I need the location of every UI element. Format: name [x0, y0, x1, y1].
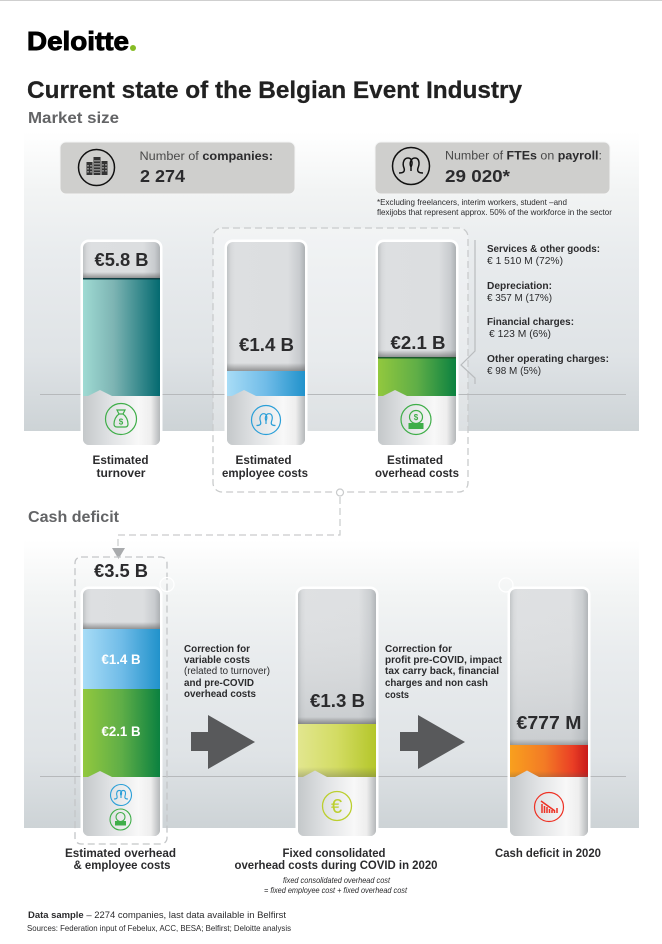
stat: number of companies	[60, 142, 295, 194]
footnote: FTEs: flexijobs that represent approx. 50% of the workforce in the sector	[377, 208, 612, 217]
text: correction for profit: charges and non cash	[385, 678, 488, 689]
circle marker: first bar	[160, 578, 174, 592]
bar: estimated overhead and employee costs: €2.1 B	[102, 723, 140, 739]
overhead breakdown list: Other operating charges:	[487, 353, 609, 365]
icon: coins: $	[414, 413, 419, 422]
arrow: first correction	[191, 715, 255, 769]
data sample note	[27, 910, 291, 933]
overhead breakdown list	[487, 243, 609, 377]
icon: people	[392, 148, 430, 184]
bar: estimated overhead costs: €2.1 B	[390, 332, 446, 353]
bar: cash deficit in 2020	[508, 586, 590, 838]
label: estimated employee costs: employee costs	[222, 466, 308, 480]
label: fixed consolidated overhead costs: Fixed consolidated	[282, 846, 386, 860]
label: estimated overhead and employee costs	[65, 846, 176, 872]
overhead breakdown list: Services & other goods:	[487, 243, 600, 255]
bar: estimated overhead costs	[376, 240, 458, 448]
bar: fixed consolidated overhead costs: €1.3 B	[310, 690, 365, 711]
data sample note: Data sample – 2274 companies, last data available in Belfirst	[28, 910, 286, 921]
bar: estimated turnover: €5.8 B	[94, 249, 148, 270]
bar: estimated overhead and employee costs	[80, 586, 162, 838]
icon: people blue	[252, 406, 280, 434]
note: formula: = fixed employee cost + fixed overhead cost	[264, 885, 408, 895]
circle marker: last bar	[499, 578, 513, 592]
icon: coins small	[110, 809, 131, 830]
text: correction for variable costs: overhead costs	[184, 689, 256, 700]
label: estimated employee costs	[222, 453, 308, 480]
dashed grouping box: employee and overhead costs	[213, 228, 468, 492]
note: formula	[264, 875, 408, 895]
bar: estimated employee costs: €1.4 B	[239, 334, 294, 355]
overhead breakdown list: € 357 M (17%)	[487, 292, 552, 304]
icon: euro	[322, 792, 352, 820]
text: correction for profit: profit pre-COVID, impact	[385, 655, 503, 666]
dashed grouping box: overhead and employee	[75, 557, 167, 844]
bar: estimated employee costs	[224, 240, 308, 448]
text: correction for variable costs: variable costs	[184, 655, 250, 666]
axis line: market size	[40, 394, 626, 396]
heading: market size: Market size	[28, 110, 119, 127]
bar: estimated overhead and employee costs: €1.4 B	[102, 651, 140, 667]
bar: estimated turnover	[80, 240, 162, 448]
overhead breakdown list: € 98 M (5%)	[487, 365, 541, 377]
overhead breakdown list: Financial charges:	[487, 316, 574, 328]
label: estimated turnover: turnover	[96, 466, 146, 480]
label: fixed consolidated overhead costs: overhead costs during COVID in 2020	[234, 858, 438, 872]
overhead breakdown list: Depreciation:	[487, 280, 552, 292]
footnote: FTEs	[377, 198, 612, 217]
arrow: second correction	[400, 715, 465, 769]
bar: fixed consolidated overhead costs	[296, 586, 378, 838]
heading: cash deficit: Cash deficit	[28, 509, 120, 526]
connector: dashed arrow from costs to deficit	[112, 489, 344, 559]
value: total costs: €3.5 B	[94, 560, 148, 581]
text: correction for profit: Correction for	[385, 644, 452, 655]
label: estimated overhead and employee costs: & employee costs	[74, 858, 171, 872]
text: correction for variable costs: and pre-COVID	[184, 678, 254, 689]
icon: coins	[401, 404, 431, 434]
text: correction for variable costs: Correction for	[184, 644, 250, 655]
Deloitte logo: Deloitte	[27, 26, 129, 56]
label: estimated turnover: Estimated	[92, 453, 148, 467]
panel: market size background	[24, 132, 639, 431]
data sample note: Sources: Federation input of Febelux, ACC, BESA; Belfirst; Deloitte analysis	[27, 923, 291, 933]
stat: number of companies: Number of companies:	[140, 151, 273, 163]
label: estimated turnover	[92, 453, 148, 480]
axis line: cash deficit	[40, 776, 626, 778]
text: correction for profit: costs	[385, 690, 409, 701]
callout bracket	[461, 240, 475, 384]
icon: people blue small	[110, 784, 132, 806]
icon: falling chart	[534, 792, 564, 822]
stat: number of FTEs: 29 020*	[445, 166, 510, 186]
label: estimated overhead and employee costs: Estimated overhead	[65, 846, 176, 860]
icon: money bag	[106, 404, 136, 434]
text: correction for profit: tax carry back, financial	[385, 666, 499, 677]
panel: cash deficit background	[24, 540, 639, 828]
text: correction for profit	[385, 644, 503, 701]
stat: number of FTEs	[375, 142, 610, 194]
overhead breakdown list: € 1 510 M (72%)	[487, 255, 563, 267]
label: estimated overhead costs	[375, 453, 459, 480]
top rule	[0, 0, 662, 1]
icon: euro: €	[331, 796, 342, 818]
label: estimated employee costs: Estimated	[236, 453, 292, 467]
title: Current state of the Belgian Event Industry	[27, 77, 522, 104]
icon: buildings	[78, 150, 114, 186]
icon: money bag: $	[119, 418, 124, 426]
stat: number of companies: 2 274	[140, 166, 185, 186]
text: correction for variable costs: (related to turnover)	[184, 666, 270, 677]
text: correction for variable costs	[184, 644, 270, 700]
note: formula: fixed consolidated overhead cost	[283, 875, 391, 885]
stat: number of FTEs: Number of FTEs on payroll :	[445, 150, 602, 162]
bar: cash deficit in 2020: €777 M	[516, 712, 582, 733]
footnote: FTEs: *Excluding freelancers, interim workers, student –and	[377, 198, 567, 207]
label: estimated overhead costs: overhead costs	[375, 466, 459, 480]
overhead breakdown list: € 123 M (6%)	[489, 328, 551, 340]
label: fixed consolidated overhead costs	[234, 846, 438, 872]
label: estimated overhead costs: Estimated	[387, 453, 443, 467]
label: cash deficit in 2020: Cash deficit in 2020	[495, 846, 601, 860]
